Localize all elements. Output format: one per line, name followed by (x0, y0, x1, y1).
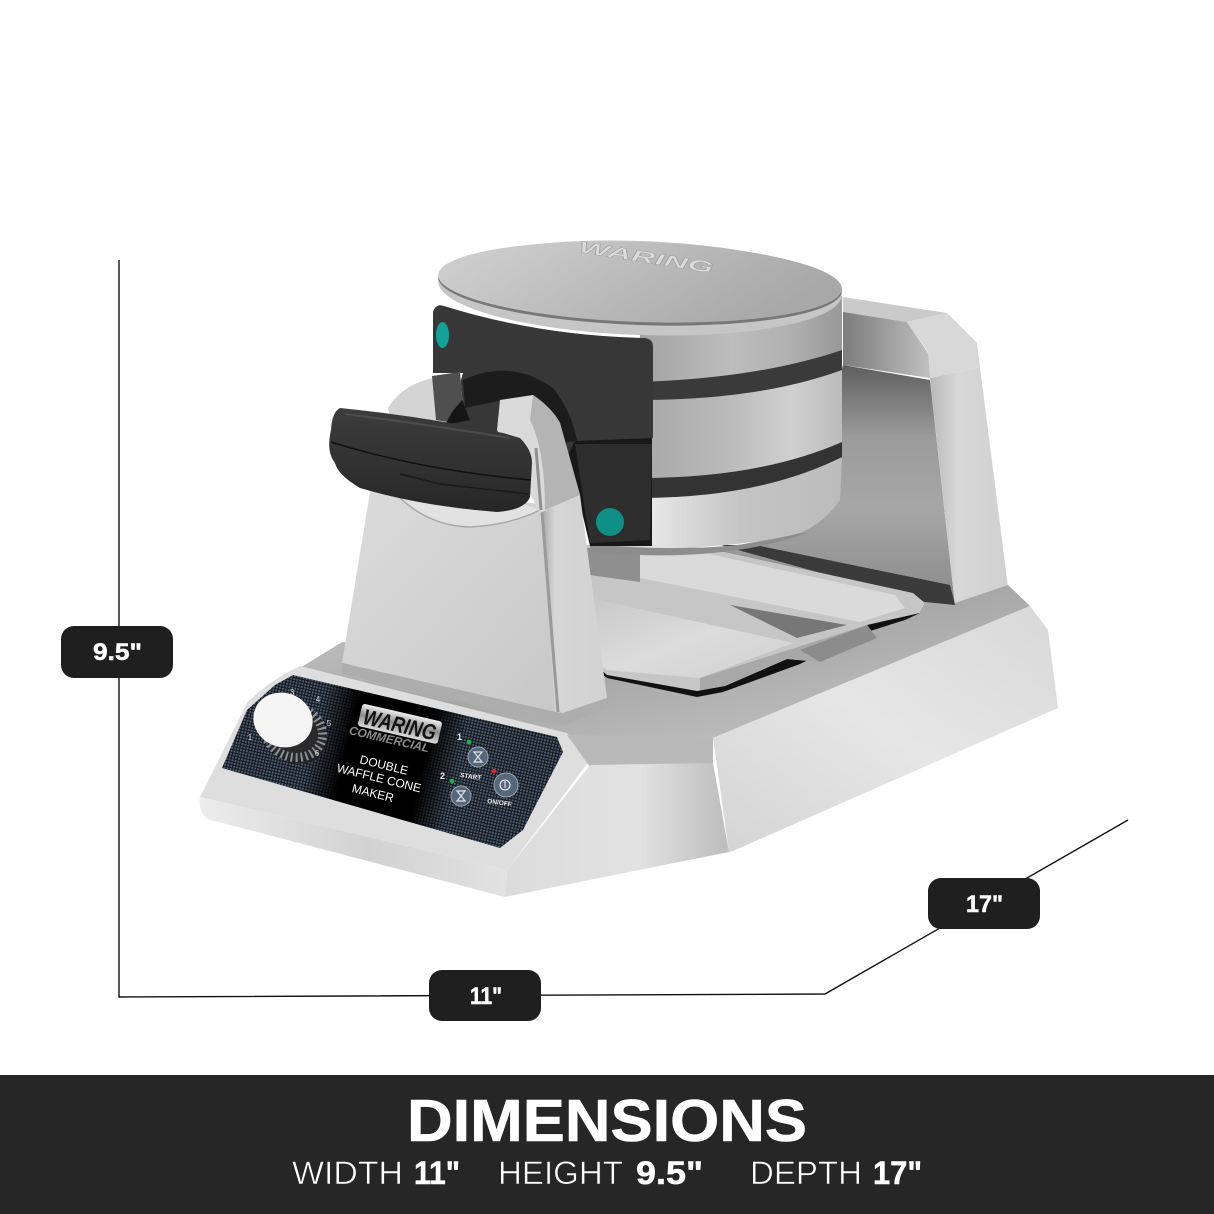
front stand (342, 395, 607, 726)
engraved logo: WARING (577, 239, 714, 277)
dimensions summary (292, 1155, 922, 1191)
button labels: START (460, 772, 482, 782)
dimensions summary: HEIGHT (498, 1155, 623, 1191)
dial numbers: 6 (315, 749, 320, 758)
dial numbers: 5 (327, 719, 332, 728)
rear handle arm (388, 372, 470, 425)
temperature dial (246, 684, 334, 772)
product name: DOUBLE (358, 752, 410, 778)
footer banner (0, 1075, 1214, 1214)
button labels: 1 (457, 732, 462, 742)
product name: WAFFLE CONE (335, 761, 422, 795)
panel black centre (222, 675, 563, 848)
title: DIMENSIONS (407, 1088, 807, 1154)
width label: 11" (470, 983, 502, 1010)
drip tray (585, 545, 955, 697)
button labels (440, 732, 512, 808)
width label (429, 970, 541, 1021)
rear support (713, 297, 1008, 605)
button labels: ON/OFF (487, 798, 512, 808)
base (199, 585, 1058, 897)
Waring Commercial logo (348, 702, 443, 757)
Waring Commercial logo: COMMERCIAL (348, 723, 431, 755)
height label: 9.5" (93, 639, 142, 666)
button labels: 2 (440, 771, 445, 781)
waffle maker product illustration (199, 234, 1058, 897)
control panel (222, 675, 563, 848)
depth label (928, 878, 1040, 929)
timer buttons (450, 740, 518, 806)
product name: MAKER (351, 781, 396, 805)
height label (61, 626, 173, 678)
dial numbers: 4 (316, 695, 321, 704)
dial numbers: 1 (248, 733, 253, 742)
dimensions summary: WIDTH (292, 1155, 403, 1191)
dial numbers: 3 (290, 688, 295, 697)
product name (335, 752, 422, 805)
top lid (437, 236, 843, 332)
Waring Commercial logo: WARING (361, 704, 439, 745)
dimensions summary: DEPTH (750, 1155, 862, 1191)
dimension lines (119, 260, 1128, 997)
waffle plates (436, 234, 844, 555)
dimensions summary: 17" (873, 1155, 922, 1191)
handle (329, 408, 532, 512)
dimensions summary: 11" (414, 1155, 460, 1191)
depth label: 17" (966, 891, 1003, 918)
dimensions summary: 9.5" (636, 1155, 703, 1191)
dial numbers (248, 688, 332, 758)
black hinge block (433, 305, 653, 546)
